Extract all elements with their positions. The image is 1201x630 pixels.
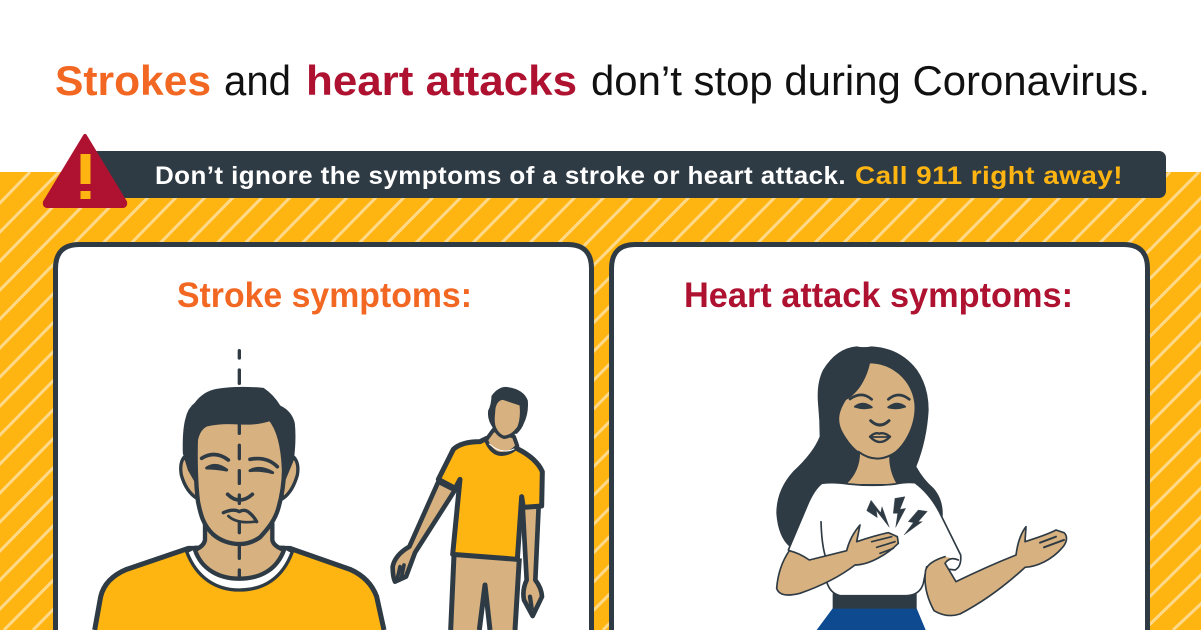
belt <box>833 593 917 609</box>
right arm <box>523 506 542 616</box>
panel: heart attack symptoms <box>612 244 1148 630</box>
right arm <box>925 527 1066 616</box>
heading: heart attack symptoms: Heart attack symptoms: <box>684 276 1073 315</box>
icon: pain bolts <box>867 497 927 535</box>
blue skirt <box>817 608 926 630</box>
warning banner <box>90 151 1166 198</box>
icon: warning triangle <box>45 136 125 206</box>
hair <box>777 347 942 547</box>
title: don’t stop during Coronavirus. <box>591 57 1150 104</box>
hair <box>488 387 527 433</box>
neck <box>847 450 897 484</box>
warning banner: Call 911 right away! <box>855 162 1123 190</box>
face <box>839 363 915 459</box>
left brow and eye <box>202 455 228 460</box>
title: and <box>224 57 291 104</box>
right brow and eye <box>250 459 277 467</box>
mouth <box>223 510 257 522</box>
warning banner: Don’t ignore the symptoms of a stroke or heart attack. <box>155 162 846 190</box>
center dashed line <box>234 351 244 579</box>
legs <box>451 555 519 630</box>
title: Strokes <box>55 57 211 104</box>
left arm <box>777 525 898 595</box>
illustration: man with weak arm <box>393 387 542 630</box>
title: heart attacks <box>306 57 577 104</box>
panel: stroke symptoms <box>56 244 592 630</box>
heading: stroke symptoms: Stroke symptoms: <box>177 276 472 315</box>
striped yellow background <box>0 172 1201 630</box>
shirt <box>438 438 542 559</box>
title <box>55 57 1150 104</box>
nose <box>228 494 252 500</box>
left arm <box>393 482 455 582</box>
illustration: woman with chest pain <box>777 347 1066 630</box>
neck <box>486 430 517 454</box>
head <box>494 399 520 437</box>
white shirt <box>788 482 961 596</box>
illustration: man with drooping face <box>95 351 384 630</box>
